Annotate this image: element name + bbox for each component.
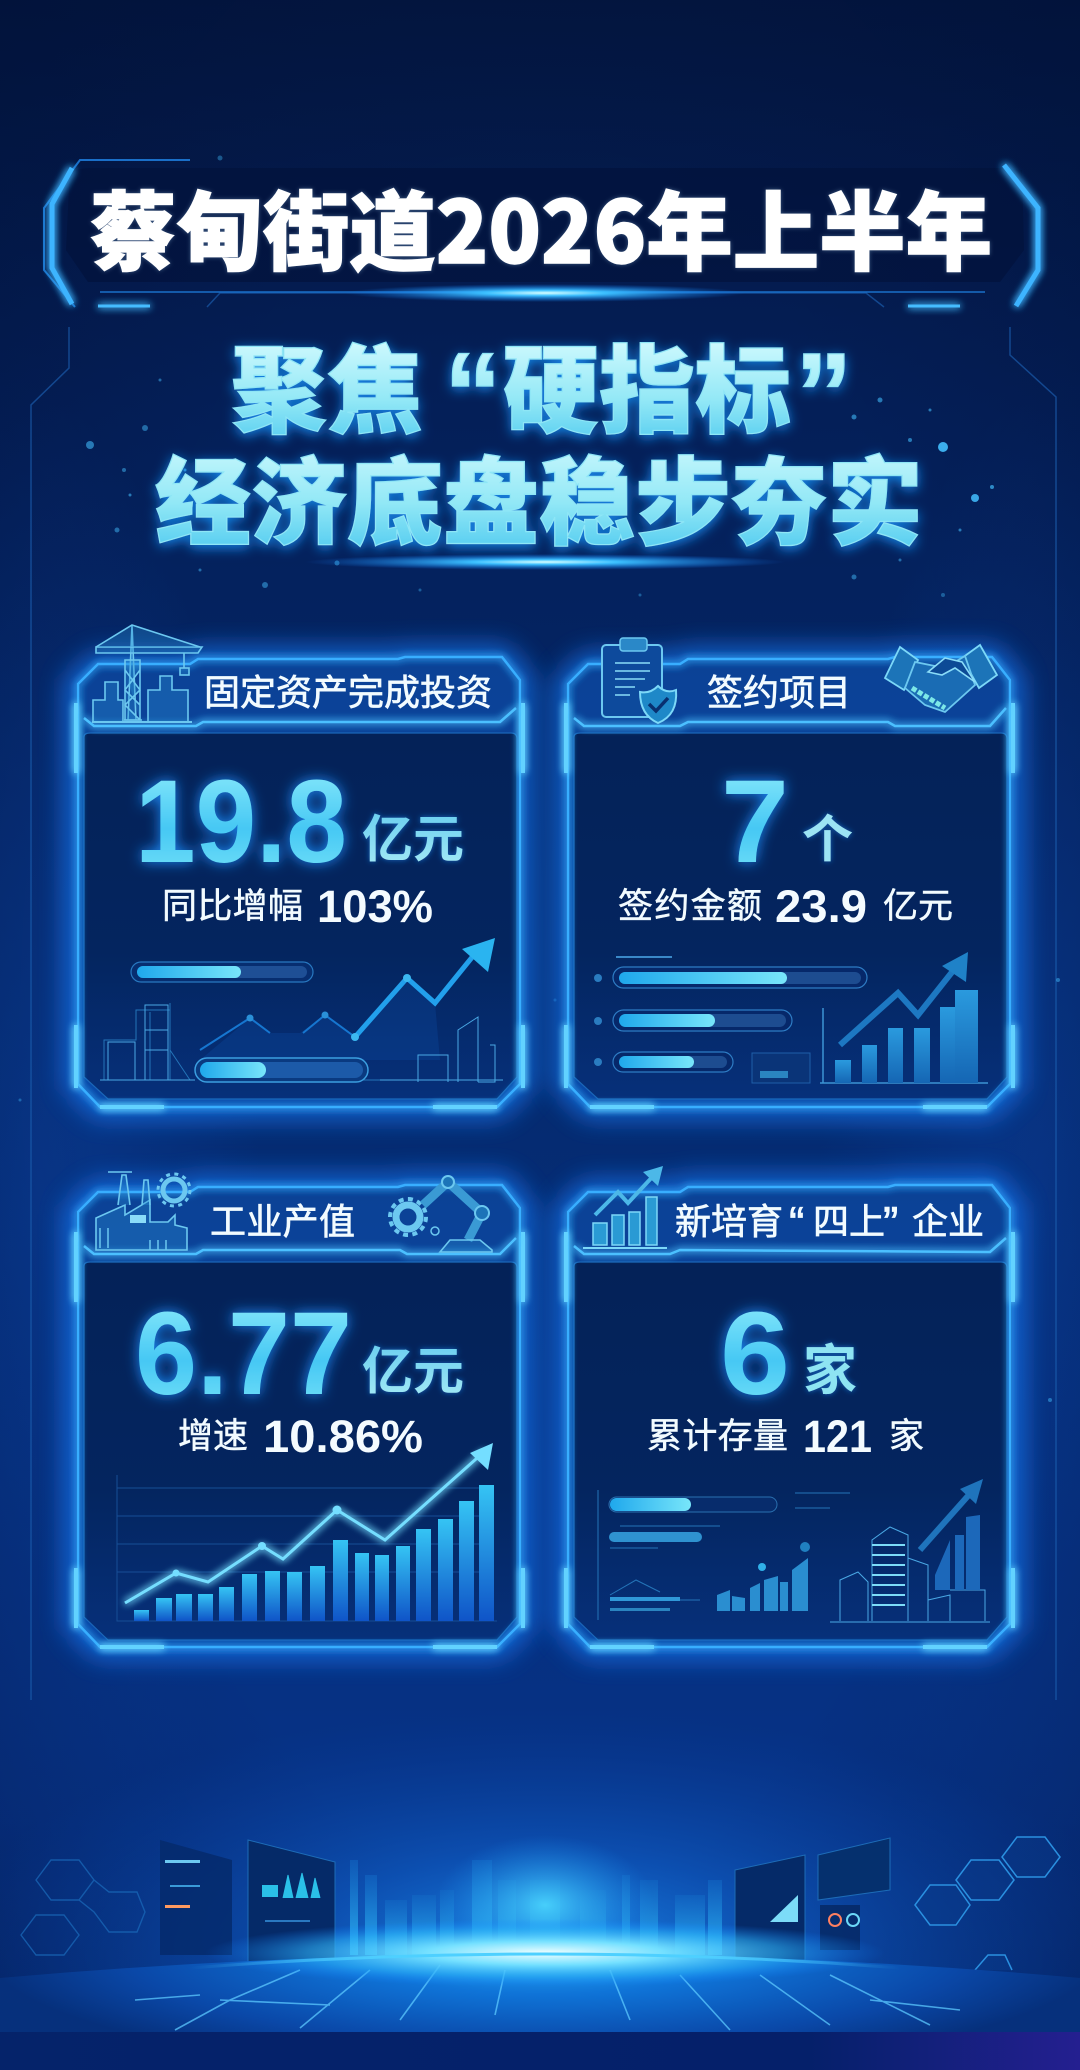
sky glow <box>0 1700 1080 2032</box>
sub: 签约金额 23.9 亿元: 签约金额 <box>618 878 762 929</box>
sub: 同比增幅 103%: 同比增幅 <box>162 878 303 929</box>
sub: 累计存量 121 家 <box>647 1408 924 1462</box>
icon: bars with arrow <box>583 1166 667 1248</box>
dashboard and city illustration <box>598 1479 990 1622</box>
title frame <box>44 160 1038 307</box>
title: 蔡甸街道2026年上半年 <box>90 163 992 288</box>
header: 工业产值: 工业产值 <box>210 1193 355 1245</box>
value: 7: 7 <box>721 756 789 888</box>
value: 6.77: 6.77 <box>135 1288 352 1420</box>
subtitle line 1: 聚焦 <box>231 339 423 446</box>
left screens <box>160 1840 335 1965</box>
chart: bars and trend line <box>117 1443 497 1621</box>
value: 19.8: 19.8 <box>135 756 347 888</box>
subtitle glow bar <box>305 554 785 570</box>
panel: 新培育“四上”企业 <box>566 1166 1013 1647</box>
bottom band <box>0 2032 1080 2070</box>
icon: factory and gear <box>96 1172 190 1250</box>
header: 新培育“四上”企业: 四上 <box>813 1201 885 1242</box>
column glow <box>435 1835 655 1975</box>
sub: 签约金额 23.9 亿元: 亿元 <box>883 878 953 929</box>
icon: handshake <box>885 645 997 712</box>
bottom tech city scene <box>0 1700 1080 2032</box>
value: 6: 6 <box>720 1288 790 1420</box>
horizon glow <box>205 1919 885 1987</box>
right screens <box>735 1838 890 1960</box>
panel: 工业产值 <box>76 1172 523 1647</box>
header: 签约项目: 签约项目 <box>707 664 851 716</box>
sub: 累计存量 121 家: 家 <box>889 1408 924 1459</box>
sub: 同比增幅 103%: 103% <box>317 881 433 932</box>
chart: rising line with progress bars <box>100 938 503 1082</box>
title glow bar <box>345 284 745 302</box>
sub: 增速 10.86% <box>178 1408 423 1462</box>
icon: robot arm and gear <box>390 1176 492 1252</box>
sub: 签约金额 23.9 亿元 <box>618 878 953 932</box>
subtitle line 1: 硬指标 <box>503 339 791 446</box>
hexagons left <box>21 1860 145 1955</box>
floor <box>0 1954 1080 2032</box>
chart: bars with arrow <box>820 952 988 1083</box>
hexagons right <box>915 1837 1060 1970</box>
header: 固定资产完成投资: 固定资产完成投资 <box>204 664 492 716</box>
icon: crane and buildings <box>92 625 202 722</box>
subtitle line 1: “ <box>444 330 502 458</box>
unit: 亿元: 亿元 <box>362 1330 464 1404</box>
unit: 家: 家 <box>803 1326 857 1405</box>
subtitle <box>155 330 923 570</box>
progress bars <box>594 957 867 1083</box>
subtitle line 1: ” <box>795 330 852 458</box>
icon: clipboard with check shield <box>602 638 676 723</box>
skyline <box>350 1860 722 1955</box>
header: 新培育“四上”企业: ” <box>883 1197 898 1249</box>
sub: 同比增幅 103% <box>162 878 433 932</box>
unit: 个: 个 <box>802 798 853 872</box>
header: 新培育“四上”企业: “ <box>789 1197 804 1249</box>
outer page frame lines <box>31 293 1056 1700</box>
sub: 累计存量 121 家: 121 <box>803 1411 872 1462</box>
subtitle line 2: 经济底盘稳步夯实 <box>155 426 923 565</box>
sub: 累计存量 121 家: 累计存量 <box>647 1408 788 1459</box>
header: 新培育“四上”企业: 新培育 <box>675 1201 783 1242</box>
panel: 签约项目 <box>566 638 1013 1107</box>
sub: 增速 10.86%: 10.86% <box>263 1411 423 1462</box>
sub: 签约金额 23.9 亿元: 23.9 <box>775 881 867 932</box>
sub: 增速 10.86%: 增速 <box>178 1408 248 1459</box>
unit: 亿元: 亿元 <box>362 798 464 872</box>
particles <box>18 156 1060 1402</box>
header: 新培育“四上”企业: 企业 <box>912 1201 984 1242</box>
panel: 固定资产完成投资 <box>76 625 523 1107</box>
